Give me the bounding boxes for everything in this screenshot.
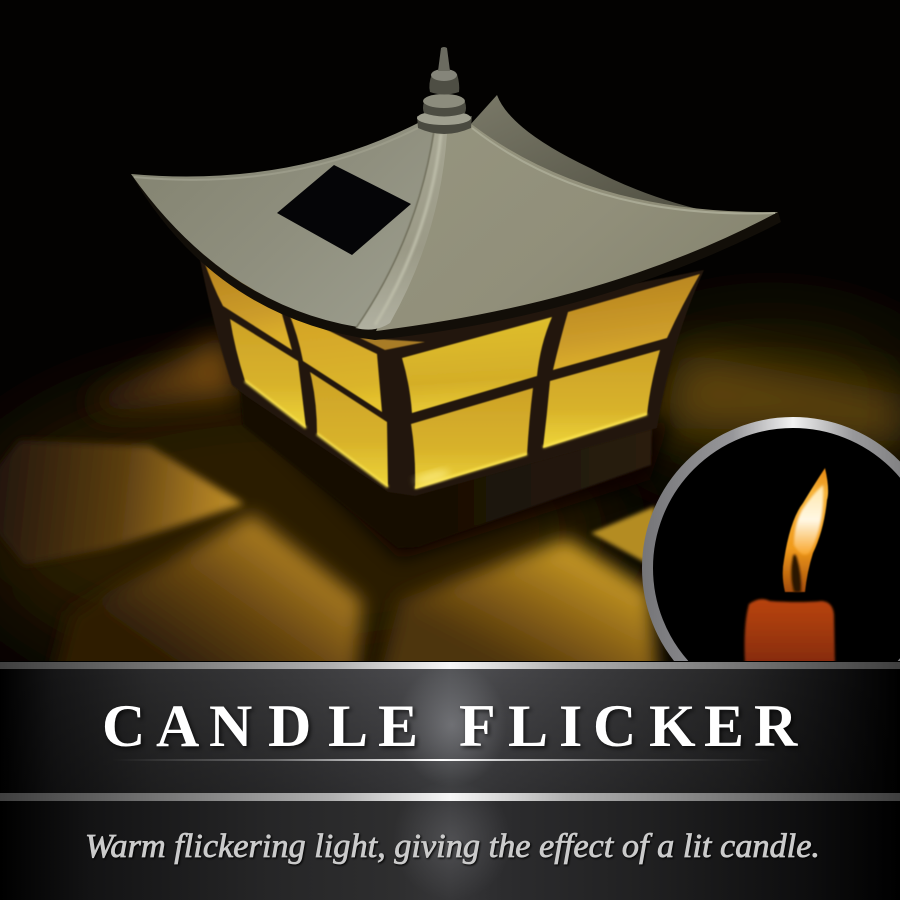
candle flame [744, 468, 835, 665]
pool: lower left [50, 514, 362, 690]
pane: left lower inner [310, 372, 388, 487]
roof underside edge [131, 174, 781, 340]
title banner [0, 661, 900, 900]
inset: candle photo [642, 417, 900, 661]
pane: front upper right [553, 274, 700, 370]
inset ring [642, 417, 900, 661]
title shadow: CANDLEFLICKER [104, 695, 800, 761]
tagline: Warm flickering light, giving the effect of a lit candle. [85, 828, 820, 865]
tagline shadow: Warm flickering light, giving the effect of a lit candle. [86, 829, 821, 866]
pane: front lower left [411, 388, 533, 489]
shadow under the lantern [300, 417, 672, 564]
glass panes [203, 258, 700, 489]
pane: left upper outer [203, 258, 292, 350]
finial [417, 47, 472, 134]
pane: front upper left [402, 317, 552, 413]
background: night ground with warm glow [0, 279, 900, 661]
bright glow at pane bottoms [245, 381, 647, 488]
candle wax body [744, 599, 835, 665]
solar panel [277, 165, 411, 255]
roof edge ribs [472, 128, 775, 213]
lantern [131, 47, 781, 548]
lantern body frame [198, 250, 704, 496]
interior glow under the roof corner [360, 338, 425, 350]
roof right face [376, 123, 778, 331]
pane: left upper inner [288, 311, 382, 412]
light pools on the ground [0, 335, 900, 690]
roof left face [131, 123, 436, 329]
roof back gable [470, 95, 720, 214]
pool: left [0, 440, 244, 565]
pane: front lower right [543, 350, 660, 448]
title: CANDLEFLICKER [102, 693, 798, 759]
pool: lower centre [376, 538, 660, 690]
pool: upper left [85, 335, 236, 414]
pool: right [662, 352, 900, 445]
lantern base [240, 385, 652, 548]
pane: left lower outer [230, 319, 306, 428]
roof ridge [356, 129, 447, 330]
pool: right of shadow line [591, 506, 655, 568]
